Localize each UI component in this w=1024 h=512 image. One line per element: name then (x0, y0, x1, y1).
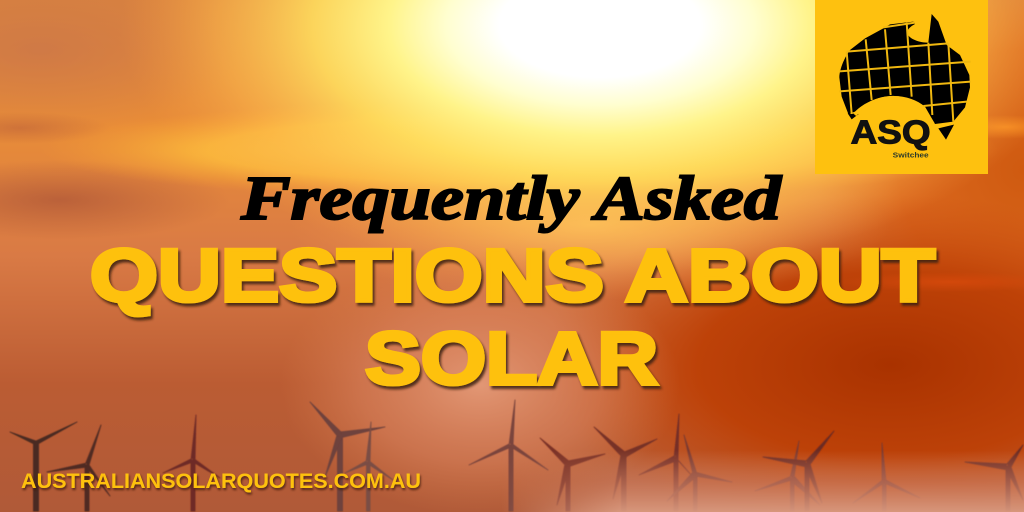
line: Questions About: QUESTIONS ABOUT (90, 234, 935, 317)
turbine 1 (10, 422, 77, 511)
icon: Australia solar panel map (839, 14, 971, 159)
turbine 7 (540, 438, 605, 511)
turbine 9 (639, 414, 693, 511)
line: Solar: SOLAR (365, 317, 658, 400)
turbine 6 (469, 400, 548, 511)
turbine 12 (763, 431, 834, 511)
Switchee wordmark: Switchee (893, 150, 929, 159)
heading: Frequently Asked: Frequently Asked (240, 165, 782, 233)
logo background (815, 0, 988, 174)
turbine 11 (755, 441, 820, 511)
turbine 13 (853, 443, 920, 511)
turbine 4 (310, 402, 385, 511)
logo: ASQ (815, 0, 988, 174)
website url: AUSTRALIANSOLARQUOTES.COM.AU (21, 470, 421, 493)
turbine 10 (667, 435, 732, 511)
turbine 14 (965, 445, 1023, 511)
wind turbines (10, 400, 1023, 511)
turbine 8 (594, 427, 657, 511)
turbine 2 (47, 425, 110, 511)
horizon haze (512, 454, 1024, 512)
turbine 3 (163, 415, 220, 511)
turbine 5 (345, 422, 393, 511)
heading: Questions About Solar (90, 234, 935, 400)
ASQ wordmark: ASQ (851, 114, 931, 151)
